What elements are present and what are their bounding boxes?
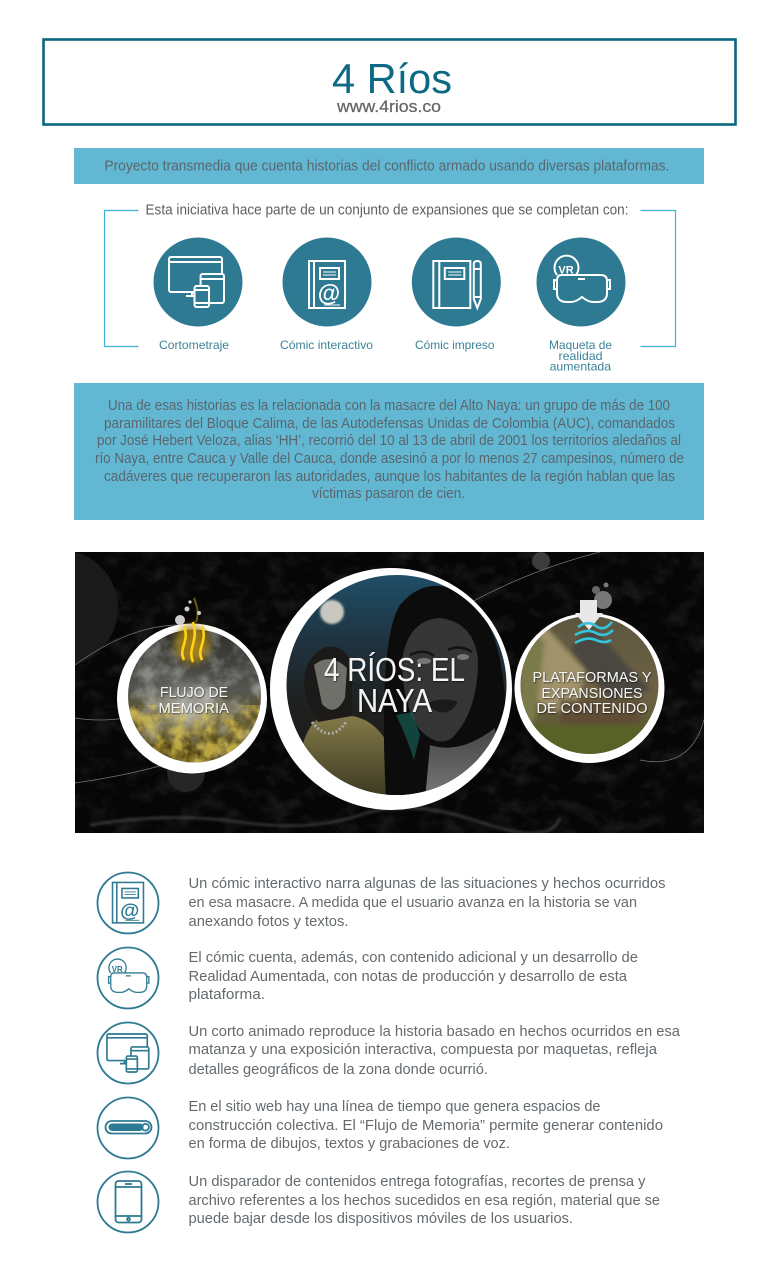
label: 4 ríos el naya	[324, 651, 465, 719]
label: plataformas y expansiones de contenido	[534, 672, 652, 714]
text	[188, 1098, 663, 1152]
text: matanza y una exposición interactiva, compuesta por maquetas, refleja	[188, 1041, 658, 1058]
text: archivo referentes a los hechos sucedidos en esa región, material que se	[188, 1192, 660, 1209]
label: maqueta de realidad aumentada: Maqueta de	[549, 338, 612, 352]
text	[188, 875, 666, 930]
icon: download arrow and waves	[575, 582, 613, 643]
icon: comic interactive: @	[120, 900, 139, 922]
text: El cómic cuenta, además, con contenido adicional y un desarrollo de	[188, 949, 638, 966]
icon: screens	[98, 1022, 158, 1084]
label: maqueta de realidad aumentada: aumentada	[550, 360, 611, 374]
text: Un disparador de contenidos entrega fotografías, recortes de prensa y	[188, 1173, 646, 1190]
label: flujo de memoria	[159, 687, 230, 715]
label: plataformas y expansiones de contenido: EXPANSIONES	[542, 685, 642, 702]
icon: vr goggles	[98, 948, 158, 1008]
icon: flame	[175, 598, 209, 663]
item: corto animado	[98, 1022, 681, 1084]
text: construcción colectiva. El “Flujo de Memoria” permite generar contenido	[188, 1117, 663, 1134]
panel: alto naya story: río Naya, entre Cauca y Valle del Cauca, donde asesinó a por lo menos 27 campesinos, número de	[95, 451, 684, 467]
label: plataformas y expansiones de contenido: PLATAFORMAS Y	[532, 669, 652, 686]
text: plataforma.	[188, 986, 265, 1003]
icon: mobile phone	[98, 1172, 158, 1232]
icon: realidad aumentada	[536, 238, 626, 326]
icon: realidad aumentada: VR	[558, 264, 574, 276]
text: anexando fotos y textos.	[188, 913, 348, 930]
label: 4 ríos el naya: NAYA	[357, 682, 432, 719]
panel: alto naya story: víctimas pasaron de cien.	[312, 486, 465, 502]
panel: alto naya story	[74, 383, 704, 520]
item: disparador de contenidos	[98, 1172, 660, 1232]
label: flujo de memoria: FLUJO DE	[160, 684, 228, 701]
illustration: woman	[384, 586, 510, 800]
icon: timeline slider	[98, 1098, 158, 1158]
circle: plataformas y expansiones	[514, 582, 664, 763]
text: puede bajar desde los dispositivos móviles de los usuarios.	[188, 1210, 573, 1227]
illustration: man	[298, 647, 404, 800]
panel: alto naya story: paramilitares del Bloque Calima, de las Autodefensas Unidas de Colombia (AUC), comandados	[104, 416, 675, 432]
intro band	[74, 148, 704, 184]
website url: www.4rios.co	[336, 98, 441, 116]
panel: expansions	[104, 202, 676, 374]
item: línea de tiempo	[98, 1098, 663, 1158]
expansions heading: Esta iniciativa hace parte de un conjunto de expansiones que se completan con:	[146, 202, 628, 218]
intro band: Proyecto transmedia que cuenta historias del conflicto armado usando diversas plataformas.	[104, 158, 669, 174]
text: Realidad Aumentada, con notas de producción y desarrollo de esta	[188, 968, 628, 985]
item: cómic interactivo	[98, 872, 666, 934]
text	[188, 1173, 660, 1227]
text: En el sitio web hay una línea de tiempo que genera espacios de	[188, 1098, 600, 1115]
text: en esa masacre. A medida que el usuario avanza en la historia se van	[188, 894, 637, 911]
panel: alto naya story: por José Hebert Veloza, alias ‘HH’, recorrió del 10 al 13 de abril de 2001 los territorios aledaños al	[97, 433, 681, 449]
text: Un cómic interactivo narra algunas de las situaciones y hechos ocurridos	[188, 875, 666, 892]
icon: vr goggles: VR	[112, 965, 123, 974]
label: cómic impreso: Cómic impreso	[415, 338, 495, 352]
label: maqueta de realidad aumentada: realidad	[558, 349, 602, 363]
label: plataformas y expansiones de contenido: DE CONTENIDO	[536, 700, 648, 717]
label: maqueta de realidad aumentada	[549, 338, 612, 374]
text: en forma de dibujos, textos y grabaciones de voz.	[188, 1135, 510, 1152]
icon: cómic interactivo: @	[318, 280, 340, 306]
circle: flujo de memoria	[117, 598, 267, 774]
panel: alto naya story: cadáveres que recuperaron las autoridades, aunque los habitantes de la región hablan que las	[104, 469, 675, 485]
item: realidad aumentada	[98, 948, 638, 1008]
panel: 4 ríos site screenshot	[75, 552, 704, 833]
circle: 4 ríos el naya	[270, 568, 512, 810]
panel: alto naya story: Una de esas historias es la relacionada con la masacre del Alto Naya: un grupo de más de 100	[108, 398, 670, 414]
text: Un corto animado reproduce la historia basado en hechos ocurridos en esa	[188, 1023, 681, 1040]
label: cortometraje: Cortometraje	[159, 338, 229, 352]
text	[188, 949, 638, 1003]
text	[188, 1023, 681, 1078]
icon: cómic interactivo	[282, 238, 372, 326]
header box	[44, 40, 736, 124]
icon: cortometraje	[154, 238, 242, 326]
icon: comic interactive	[98, 872, 158, 934]
icon: cómic impreso	[412, 238, 501, 326]
label: cómic interactivo: Cómic interactivo	[280, 338, 373, 352]
text: detalles geográficos de la zona donde ocurrió.	[188, 1061, 488, 1078]
title: 4 Ríos	[332, 55, 452, 102]
label: 4 ríos el naya: 4 RÍOS: EL	[324, 651, 465, 688]
label: flujo de memoria: MEMORIA	[158, 700, 229, 717]
